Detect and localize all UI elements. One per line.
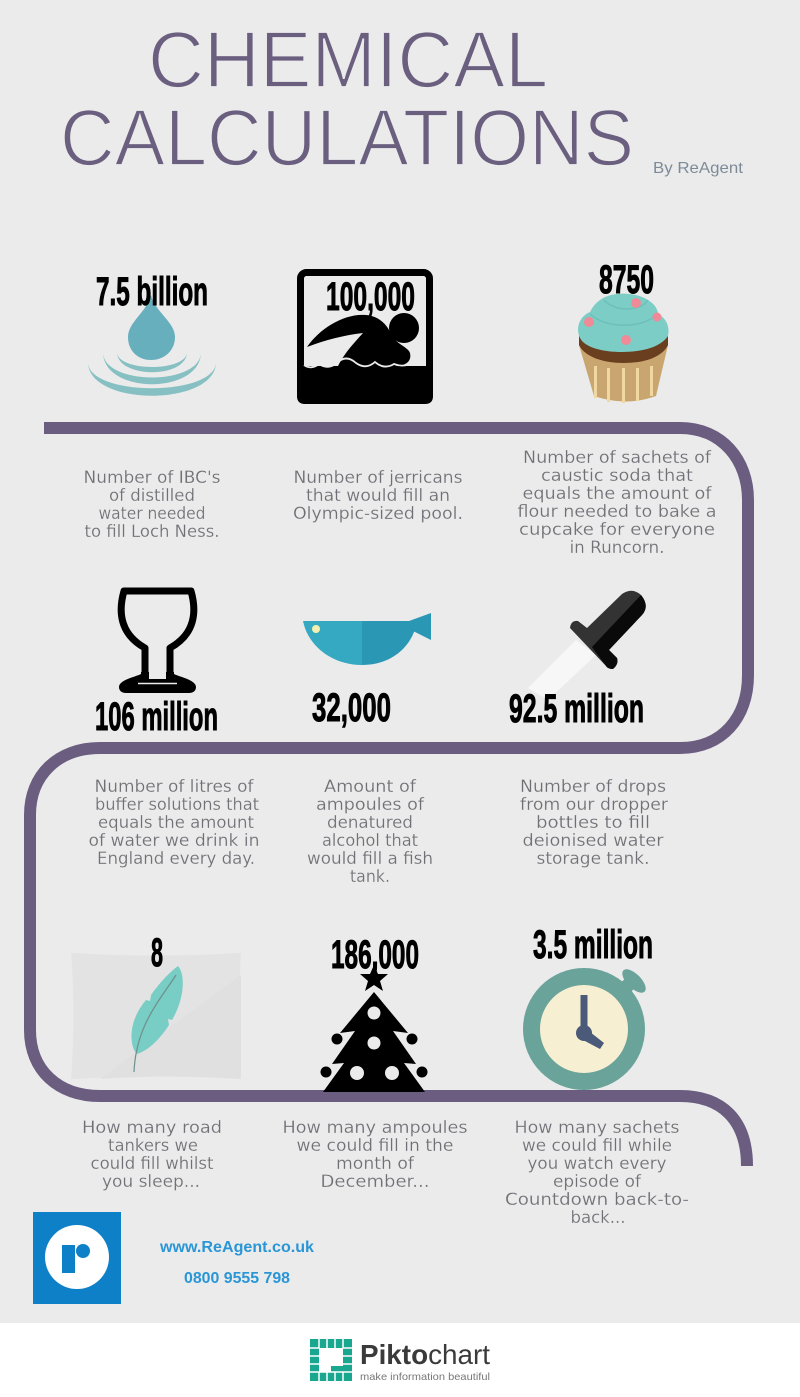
text: road tankers caption: How many road: [82, 1118, 222, 1138]
number: 8750: 8750: [599, 258, 654, 302]
text: denatured alcohol caption: would fill a fish: [307, 849, 433, 869]
contact details: www.ReAgent.co.uk: [159, 1239, 314, 1256]
text: caustic soda caption: Number of sachets of: [523, 448, 712, 468]
logo: ReAgent: [33, 1212, 121, 1304]
icon: feather on pillow: [71, 953, 241, 1079]
text: caustic soda caption: [518, 448, 716, 558]
text: dropper bottles caption: Number of drops: [520, 777, 666, 797]
text: caustic soda caption: cupcake for everyone: [519, 520, 715, 540]
text: IBC caption: of distilled: [109, 486, 195, 506]
text: road tankers caption: tankers we: [108, 1136, 198, 1156]
text: Countdown caption: How many sachets: [514, 1118, 680, 1138]
text: caustic soda caption: equals the amount of: [522, 484, 713, 504]
text: buffer solutions caption: of water we drink in: [88, 831, 260, 851]
text: jerricans caption: Number of jerricans: [294, 468, 463, 488]
text: IBC caption: Number of IBC's: [84, 468, 221, 488]
text: jerricans caption: Olympic-sized pool.: [293, 504, 463, 524]
text: IBC caption: [84, 468, 221, 542]
icon: dropper: [528, 591, 646, 700]
footer: Piktochart logo: [310, 1339, 490, 1383]
text: Countdown caption: [505, 1118, 689, 1228]
icon: swimmer: [297, 272, 433, 404]
title: CHEMICAL: [148, 15, 548, 104]
text: dropper bottles caption: deionised water: [522, 831, 664, 851]
number: 8: 8: [151, 931, 163, 975]
text: buffer solutions caption: [88, 777, 260, 869]
number: 186,000: 186,000: [331, 933, 419, 977]
title: [60, 15, 634, 182]
icon: wine glass: [119, 591, 196, 693]
text: Countdown caption: we could fill while: [522, 1136, 672, 1156]
number: 106 million: 106 million: [95, 695, 218, 739]
text: buffer solutions caption: equals the amount: [98, 813, 254, 833]
text: denatured alcohol caption: ampoules of: [316, 795, 425, 815]
text: ampoules caption: we could fill in the: [296, 1136, 454, 1156]
title: CALCULATIONS: [60, 93, 634, 182]
text: denatured alcohol caption: Amount of: [324, 777, 417, 797]
number: 3.5 million: 3.5 million: [533, 923, 653, 967]
text: road tankers caption: [82, 1118, 222, 1192]
text: caustic soda caption: in Runcorn.: [570, 538, 664, 558]
contact details: [159, 1239, 314, 1287]
text: ampoules caption: How many ampoules: [282, 1118, 468, 1138]
text: denatured alcohol caption: denatured: [327, 813, 413, 833]
text: road tankers caption: could fill whilst: [90, 1154, 214, 1174]
text: caustic soda caption: caustic soda that: [541, 466, 693, 486]
text: jerricans caption: that would fill an: [306, 486, 450, 506]
text: dropper bottles caption: storage tank.: [536, 849, 650, 869]
text: buffer solutions caption: buffer solutions that: [95, 795, 259, 815]
footer: Piktochart logo: Piktochart: [360, 1339, 490, 1370]
text: Countdown caption: back...: [570, 1208, 626, 1228]
byline: By ReAgent: [653, 160, 744, 177]
icon: stopwatch: [523, 965, 650, 1090]
text: ampoules caption: December...: [320, 1172, 430, 1192]
text: caustic soda caption: flour needed to bake a: [518, 502, 716, 522]
text: denatured alcohol caption: tank.: [350, 867, 390, 887]
text: ampoules caption: [282, 1118, 468, 1192]
text: dropper bottles caption: from our dropper: [520, 795, 668, 815]
text: buffer solutions caption: England every day.: [97, 849, 255, 869]
text: buffer solutions caption: Number of litres of: [94, 777, 255, 797]
text: denatured alcohol caption: [307, 777, 433, 887]
text: road tankers caption: you sleep...: [102, 1172, 200, 1192]
icon: water drop with ripples: [88, 295, 216, 396]
icon: fish: [303, 613, 431, 665]
winding timeline path: [30, 428, 748, 1166]
contact details: 0800 9555 798: [184, 1270, 290, 1287]
number: 7.5 billion: 7.5 billion: [96, 270, 208, 314]
number: 92.5 million: 92.5 million: [509, 687, 644, 731]
text: dropper bottles caption: [520, 777, 668, 869]
number: 100,000: 100,000: [326, 275, 415, 319]
text: Countdown caption: episode of: [553, 1172, 642, 1192]
text: Countdown caption: Countdown back-to-: [505, 1190, 689, 1210]
text: Countdown caption: you watch every: [528, 1154, 666, 1174]
text: denatured alcohol caption: alcohol that: [322, 831, 418, 851]
icon: cupcake: [578, 294, 669, 403]
icon: christmas tree: [320, 965, 428, 1092]
text: jerricans caption: [293, 468, 463, 524]
footer: Piktochart logo: make information beautiful: [360, 1371, 490, 1383]
text: IBC caption: to fill Loch Ness.: [84, 522, 220, 542]
text: IBC caption: water needed: [98, 504, 206, 524]
text: dropper bottles caption: bottles to fill: [536, 813, 650, 833]
number: 32,000: 32,000: [312, 686, 391, 730]
text: ampoules caption: month of: [336, 1154, 415, 1174]
